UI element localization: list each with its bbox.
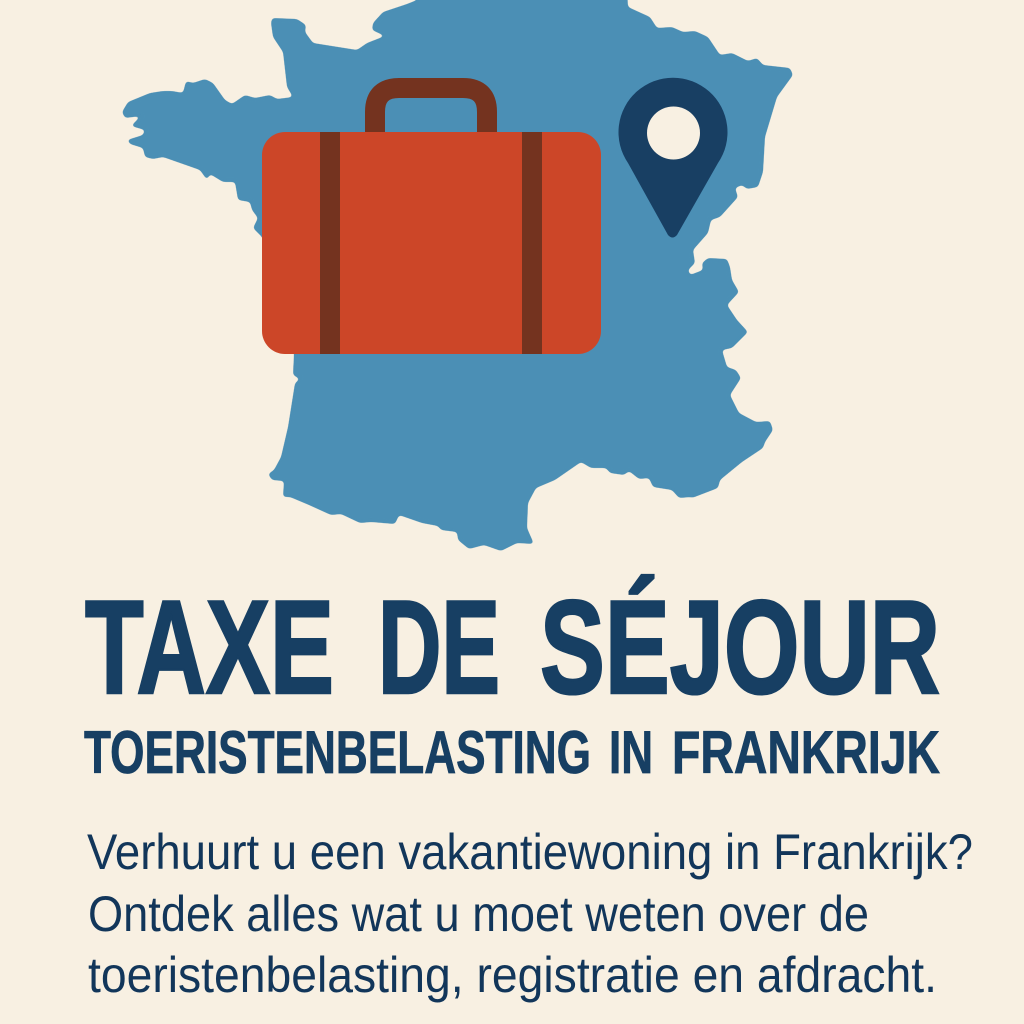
suitcase handle — [375, 88, 487, 133]
subtitle: FRANKRIJK — [672, 719, 940, 786]
left strap — [320, 132, 340, 354]
subtitle: IN — [609, 719, 653, 786]
icon: suitcase — [262, 88, 601, 354]
subtitle: TOERISTENBELASTING — [84, 719, 591, 786]
body text: Ontdek alles wat u moet weten over de — [88, 886, 869, 942]
body text: toeristenbelasting, registratie en afdracht. — [88, 947, 937, 1003]
icon: location pin — [618, 78, 727, 238]
title: TAXE — [85, 574, 334, 722]
suitcase body — [262, 132, 601, 354]
body text — [87, 824, 973, 1003]
right strap — [522, 132, 542, 354]
map of France — [122, 0, 793, 551]
title — [85, 574, 940, 722]
title: DE — [378, 574, 500, 722]
pin hole — [647, 106, 700, 160]
